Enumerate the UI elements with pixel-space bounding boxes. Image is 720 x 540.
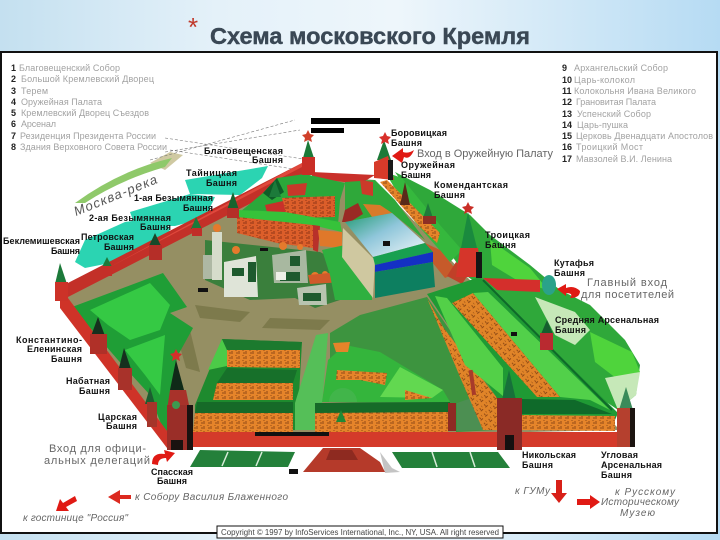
wall top highlight <box>110 163 302 267</box>
callout: delegations entrance <box>44 443 150 467</box>
green cornice <box>373 243 433 265</box>
roof dark middle <box>217 368 297 383</box>
legend: left list: Кремлевский Дворец Съездов <box>21 108 149 118</box>
tower labels: Башня <box>391 138 422 148</box>
direction: Rossiya hotel: к гостинице "Россия" <box>23 513 128 524</box>
legend: right list: Троицкий Мост <box>576 142 643 152</box>
label: Moskva river: Москва-река <box>72 171 160 219</box>
tower labels: Башня <box>183 203 213 213</box>
west wall (Kremlin) <box>60 298 170 448</box>
tower: Troitskaya <box>456 202 482 278</box>
tower labels: Оружейная <box>401 160 455 170</box>
legend: right list: Царь-колокол <box>574 75 635 85</box>
tower labels: Башня <box>51 246 80 256</box>
mausoleum <box>303 448 385 472</box>
tower labels: Башня <box>206 178 237 188</box>
mausoleum top <box>326 450 358 460</box>
tower labels: Башня <box>252 155 283 165</box>
title: Схема московского Кремля <box>210 23 530 49</box>
tower: Borovitskaya <box>374 132 394 180</box>
panel: Arsenal <box>427 277 618 431</box>
tower: Konstantino-Eleninskaya <box>90 317 107 354</box>
orange east facade <box>452 293 560 397</box>
outer light green patches <box>490 240 640 385</box>
panel: Kremlin grounds <box>65 175 620 440</box>
green base <box>427 277 618 420</box>
Ivan the Great bell tower <box>212 232 222 280</box>
left lawn highlight <box>90 283 170 395</box>
red wall segments <box>469 370 476 395</box>
legend: left list: 3 <box>11 86 16 96</box>
direction: St Basil's: к Собору Василия Блаженного <box>135 491 288 503</box>
legend: left list: Арсенал <box>21 119 56 129</box>
red gable <box>342 203 363 222</box>
legend: left list: Здания Верховного Совета России <box>20 142 167 152</box>
tower labels: Никольская <box>522 450 576 460</box>
red roof patch <box>287 183 307 196</box>
orange row 2 <box>213 383 293 400</box>
tower labels: Угловая <box>601 450 638 460</box>
legend: left list: 8 <box>11 142 16 152</box>
Kutafya bridge <box>483 278 540 292</box>
tower labels: Петровская <box>81 232 134 242</box>
direction: GUM: к ГУМу <box>515 486 551 497</box>
legend: right list: Успенский Собор <box>577 109 651 119</box>
roof dark top <box>222 339 302 350</box>
legend: left list: 4 <box>11 97 16 107</box>
tower labels: Комендантская <box>434 180 508 190</box>
light strip <box>295 333 328 430</box>
tower labels: Беклемишевская <box>3 236 80 246</box>
legend: right list: Царь-пушка <box>577 120 628 130</box>
legend: left list: 2 <box>11 74 16 84</box>
Kutafya tower <box>542 275 556 295</box>
mid lawn <box>330 297 497 432</box>
direction: Historical Museum: к Русскому <box>615 487 676 498</box>
tower labels: Башня <box>51 354 82 364</box>
roof dark lower <box>195 402 293 413</box>
orange gable <box>363 204 392 217</box>
tower flanks <box>203 255 212 279</box>
tower labels: Башня <box>601 470 632 480</box>
left lawn <box>72 273 193 437</box>
golden domes <box>213 224 328 280</box>
callout: delegations entrance: альных делегаций <box>44 455 150 467</box>
Twelve Apostles <box>297 284 327 305</box>
tower labels: Башня <box>554 268 585 278</box>
roof <box>345 213 425 257</box>
light green west roof <box>208 339 227 370</box>
arrow: to GUM <box>551 480 567 503</box>
Grand Kremlin Palace facade <box>237 217 313 248</box>
ground shading <box>172 305 330 372</box>
outer green slope east <box>395 172 640 410</box>
towers <box>55 130 635 450</box>
Moskva river <box>75 120 310 268</box>
tower: Komendantskaya <box>423 203 436 224</box>
orange triangle south <box>405 390 432 400</box>
callout: delegations entrance: Вход для офици- <box>49 443 146 455</box>
small inner tower <box>336 410 346 422</box>
marker <box>511 332 517 336</box>
tower labels: Башня <box>485 240 516 250</box>
south wall <box>193 432 625 447</box>
callout: main entrance: для посетителей <box>581 289 674 301</box>
dark roof <box>315 402 450 413</box>
Archangel cathedral <box>224 256 258 297</box>
dark ridge <box>263 178 284 200</box>
legend: left list: Большой Кремлевский Дворец <box>21 74 154 84</box>
light roof wedge <box>380 367 443 398</box>
tower: Taynitskaya <box>227 192 239 218</box>
callout: main entrance <box>581 277 674 301</box>
markers <box>198 248 290 300</box>
orange west facade <box>427 298 497 430</box>
legend: right list: 13 <box>562 109 572 119</box>
palace red end <box>313 225 320 252</box>
legend: right list: Грановитая Палата <box>576 97 656 107</box>
legend: left list: 5 <box>11 108 16 118</box>
tower: 1st Bezymyannaya <box>191 217 202 236</box>
legend: left list: Оружейная Палата <box>21 97 102 107</box>
arrow: to St Basil's <box>108 490 131 504</box>
direction: Historical Museum <box>601 487 680 519</box>
tower: Tsarskaya <box>145 387 157 427</box>
tower: 2nd Bezymyannaya <box>149 233 162 260</box>
panel: Red Square <box>190 448 510 474</box>
legend: left list <box>11 63 167 152</box>
tower labels: Башня <box>157 476 187 486</box>
panel: cathedrals <box>198 224 372 308</box>
panel: palace complex <box>237 174 392 252</box>
tower: Nabatnaya <box>118 348 132 390</box>
legend: right list: 9 <box>562 63 567 73</box>
tower labels: Арсенальная <box>601 460 662 470</box>
direction: Historical Museum: Историческому <box>601 497 680 508</box>
white facade <box>276 272 286 280</box>
legend: right list: 12 <box>562 97 572 107</box>
orange red roofs <box>308 270 355 284</box>
title: * <box>188 12 198 42</box>
ground shrubs <box>205 240 345 308</box>
legend: right list: 17 <box>562 154 572 164</box>
tower labels: Башня <box>106 421 137 431</box>
orange triangle north <box>333 342 350 352</box>
tower: Beklemishevskaya <box>55 263 68 301</box>
panel: Senate and south buildings <box>193 339 302 432</box>
tower labels: Набатная <box>66 376 110 386</box>
Grand palace green roof <box>238 210 342 232</box>
callout: main entrance: Главный вход <box>587 277 668 289</box>
legend: left list: 6 <box>11 119 16 129</box>
orange row bottom <box>522 415 615 431</box>
Terem palace block <box>282 196 335 218</box>
legend: right list: Колокольня Ивана Великого <box>574 86 696 96</box>
tower: Blagoveshchenskaya <box>269 180 281 197</box>
tower labels: 1-ая Безымянная <box>134 193 213 203</box>
tower labels: Тайницкая <box>186 168 237 178</box>
side wall <box>342 228 375 298</box>
tower: Nikolskaya <box>497 370 522 450</box>
panel: Kremlin Palace of Congresses <box>342 213 435 298</box>
tower labels: Царская <box>98 412 137 422</box>
tower: Spasskaya <box>167 349 193 450</box>
arrow: Armoury entrance <box>392 148 414 163</box>
tower labels: 2-ая Безымянная <box>89 213 171 223</box>
dome <box>329 388 357 402</box>
palace roofs green <box>240 174 345 228</box>
marker <box>383 241 390 246</box>
south-west wall along river <box>62 163 302 298</box>
tower labels: Троицкая <box>485 230 530 240</box>
armoury block <box>318 230 342 248</box>
legend: right list: 16 <box>562 142 572 152</box>
panel: central green block <box>295 297 497 433</box>
legend: left list: Резиденция Президента России <box>20 131 156 141</box>
tower: Srednyaya Arsenalnaya <box>540 320 553 350</box>
copyright box: Copyright © 1997 by InfoServices International, Inc., NY, USA. All right reserved <box>221 528 499 537</box>
arrow: to Historical Museum <box>577 495 600 509</box>
green inner court <box>322 345 450 402</box>
north wall <box>312 172 375 184</box>
tower labels: Благовещенская <box>204 146 283 156</box>
pale patches east <box>535 297 640 410</box>
marker <box>289 469 298 474</box>
green footprint <box>195 339 302 432</box>
tower labels: Кутафья <box>554 258 594 268</box>
tower labels: Башня <box>522 460 553 470</box>
north-east wall Borovitskaya to Troitskaya <box>345 172 470 284</box>
legend: right list: 11 <box>562 86 572 96</box>
light roof <box>435 296 503 396</box>
right garden bed <box>392 452 510 468</box>
legend: left list: 7 <box>11 131 16 141</box>
legend: right list: 15 <box>562 131 572 141</box>
tower labels: Башня <box>434 190 465 200</box>
tower labels: Еленинская <box>27 344 82 354</box>
arrow: to Rossiya hotel <box>56 496 77 511</box>
orange row 3 <box>193 413 293 432</box>
tower labels: Башня <box>140 222 171 232</box>
legend: right list: Архангельский Собор <box>574 63 668 73</box>
cathedral shadows <box>232 256 321 301</box>
darker lawn <box>457 395 484 431</box>
tower labels: Башня <box>104 242 134 252</box>
orange row 1 <box>227 350 300 368</box>
tower labels: Средняя Арсенальная <box>555 315 659 325</box>
tower: Petrovskaya <box>102 257 112 276</box>
direction: Historical Museum: Музею <box>620 508 655 519</box>
legend: right list: Церковь Двенадцати Апостолов <box>576 131 713 141</box>
tower labels: Башня <box>555 325 586 335</box>
tower labels: Боровицкая <box>391 128 447 138</box>
callout: Armoury entrance: Вход в Оружейную Палату <box>417 148 554 160</box>
tower labels: Башня <box>401 170 431 180</box>
title <box>188 12 530 49</box>
tower labels: Спасская <box>151 467 193 477</box>
tower labels: Константино- <box>16 335 82 345</box>
tower: Uglovaya Arsenalnaya <box>617 387 635 447</box>
tower labels <box>3 128 662 486</box>
orange row 4 <box>315 412 448 433</box>
green court <box>322 245 372 300</box>
blue band <box>375 252 433 272</box>
tower: Oruzheinaya <box>400 182 410 205</box>
legend: left list: 1 <box>11 63 16 73</box>
dark roof north-south <box>522 399 612 414</box>
mausoleum shadow <box>380 452 400 473</box>
legend: left list: Благовещенский Собор <box>19 63 120 73</box>
legend: right list: 10 <box>562 75 572 85</box>
left garden bed <box>190 450 295 467</box>
dark edge line <box>483 280 612 410</box>
legend: right list: Мавзолей В.И. Ленина <box>576 154 672 164</box>
tower: Blagoveshchenskaya corner <box>302 130 315 175</box>
legend: right list: 14 <box>562 120 572 130</box>
small red tower <box>448 403 456 431</box>
redaction bars <box>311 118 380 133</box>
legend: left list: Терем <box>21 86 48 96</box>
legend: right list <box>562 63 713 164</box>
arrow: main entrance <box>557 284 580 298</box>
Terem red side <box>265 201 287 218</box>
front wall <box>375 262 435 298</box>
black bar on wall <box>255 432 329 436</box>
light east strip <box>473 292 610 410</box>
left bed stripes <box>222 452 262 466</box>
orange block west <box>336 370 387 385</box>
right bed stripes <box>432 452 475 467</box>
tower labels: Башня <box>79 386 110 396</box>
Assumption cathedral <box>272 250 308 283</box>
arrow: Spasskaya entrance <box>152 450 175 465</box>
